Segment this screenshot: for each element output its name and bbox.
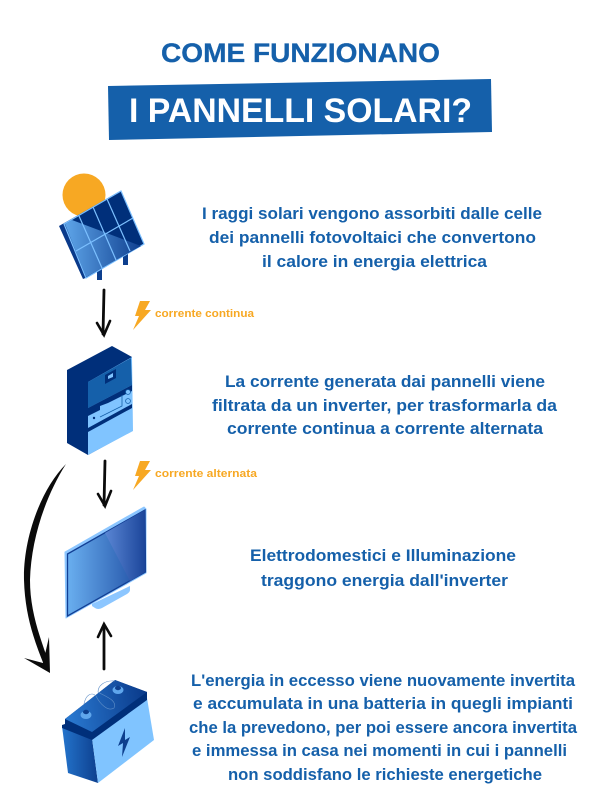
text: step 4: L'energia in eccesso viene nuovamente invertita (191, 671, 576, 690)
text: step 4 (189, 671, 578, 784)
text: step 1: il calore in energia elettrica (262, 252, 488, 271)
icon: sun (62, 174, 106, 216)
text: step 3 (250, 546, 516, 590)
title banner (108, 79, 492, 140)
label: direct current: corrente continua (155, 308, 255, 320)
text: step 2: La corrente generata dai pannelli viene (225, 372, 545, 391)
icon: inverter (67, 346, 133, 455)
icon: battery (62, 680, 154, 783)
icon: lightning, direct current (133, 301, 151, 330)
text: step 2: corrente continua a corrente alternata (227, 419, 544, 438)
text: step 2: filtrata da un inverter, per trasformarla da (212, 396, 558, 415)
title banner: I PANNELLI SOLARI? (129, 92, 472, 130)
text: step 1: dei pannelli fotovoltaici che convertono (209, 228, 536, 247)
text: step 4: non soddisfano le richieste energetiche (228, 765, 542, 784)
text: step 4: che la prevedono, per poi essere ancora invertita (189, 718, 578, 737)
arrow: panel to inverter (97, 290, 110, 335)
text: step 1 (202, 204, 542, 271)
text: step 3: Elettrodomestici e Illuminazione (250, 546, 516, 565)
text: step 4: e accumulata in una batteria in quegli impianti (193, 694, 573, 713)
icon: monitor (65, 507, 146, 618)
text: step 1: I raggi solari vengono assorbiti dalle celle (202, 204, 542, 223)
icon: lightning, alternating current (133, 461, 151, 490)
text: step 2 (212, 372, 558, 438)
arrow: battery to appliances (98, 624, 111, 669)
arrow: inverter to battery (curved) (24, 464, 66, 673)
text: step 4: e immessa in casa nei momenti in cui i pannelli (192, 741, 567, 760)
icon: solar panel (59, 191, 144, 280)
label: alternating current: corrente alternata (155, 468, 258, 480)
arrow: inverter to appliances (98, 461, 111, 506)
title: COME FUNZIONANO (161, 38, 440, 68)
text: step 3: traggono energia dall'inverter (261, 571, 508, 590)
